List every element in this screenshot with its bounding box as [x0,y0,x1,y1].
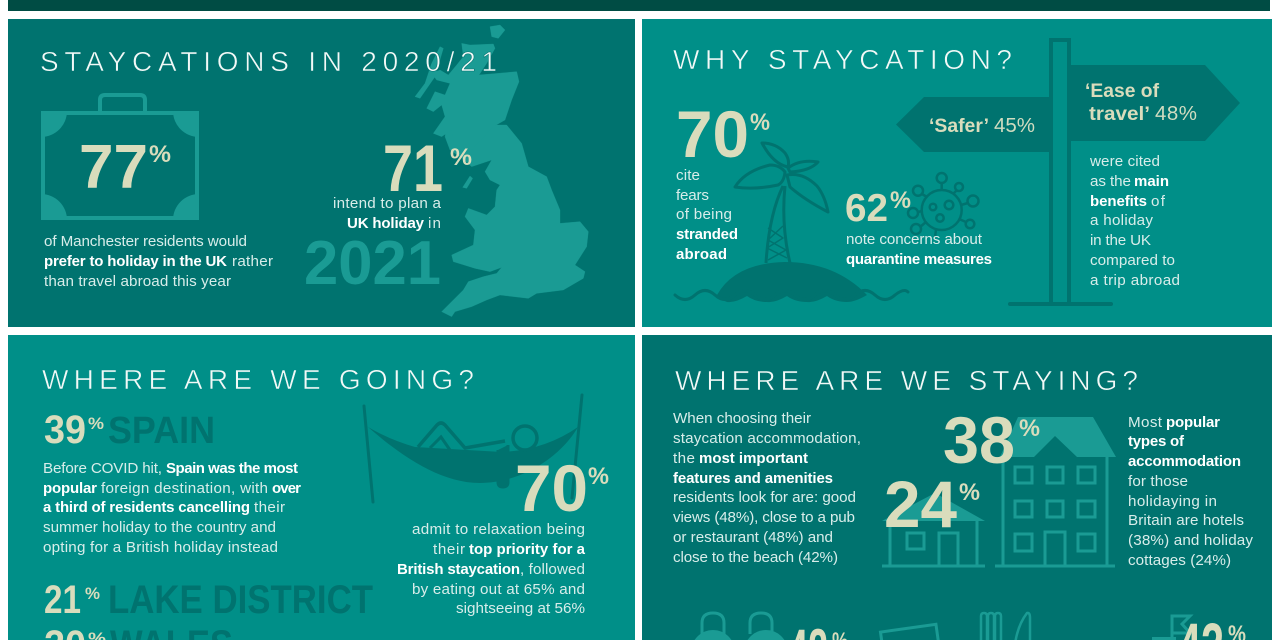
text: Spain paragraph: a third of residents cancelling [43,499,250,516]
icon: hammock [364,395,582,502]
stat: 70% stranded: % [750,109,770,136]
text: fears of being stranded [676,167,738,263]
text: features and amenities: staycation accommodation, [673,430,861,447]
text: popular accommodation: popular [1166,414,1220,431]
stat: 77%: % [149,141,171,168]
text: main benefits: of [1151,193,1166,210]
text: popular accommodation: Britain are hotels [1128,512,1244,529]
text: main benefits: compared to [1090,252,1175,269]
text: Manchester residents [44,233,273,290]
icon: card [880,624,942,640]
text: Spain paragraph: opting for a British holiday instead [43,539,278,556]
text: features and amenities: or restaurant (48%) and [673,529,833,546]
sign label: safer: 45% [994,114,1035,137]
text: Spain paragraph [43,460,301,556]
icon: beach flag [1152,616,1190,640]
icon: binoculars [691,613,788,640]
text: fears of being stranded: fears [676,187,709,204]
text: features and amenities: views (48%), close to a pub [673,509,855,526]
stat: 21% Lake District: 21 [44,578,81,622]
sign label: safer [929,114,1035,137]
panel: why staycation [642,19,1272,327]
text: main benefits [1089,153,1180,289]
stat: 71%: 71 [383,131,443,205]
heading: WHY STAYCATION? [673,44,1012,75]
text: main benefits: main [1134,173,1169,190]
text: Spain paragraph: foreign destination, with [101,480,268,497]
icon: palm tree island [675,143,908,302]
stat: 62%: % [890,187,911,214]
stat: 39% Spain: SPAIN [108,410,215,452]
text: fears of being stranded: cite [676,167,700,184]
text: popular accommodation: cottages (24%) [1128,552,1231,569]
text: intend to plan: intend to plan a [333,195,442,212]
text: main benefits: as the [1090,173,1131,190]
map of the UK [415,25,588,317]
text: relaxation: top priority for a [469,541,586,558]
text: Spain paragraph: popular [43,480,97,497]
stat: 21% Lake District: % [85,584,100,603]
text: Manchester residents: prefer to holiday in the UK [44,253,227,270]
text: Spain paragraph: summer holiday to the country and [43,519,276,536]
stat: 70% relaxation: % [588,463,609,490]
stat: 38%: 38 [943,403,1015,477]
panel: staycations in 2020/21 [8,19,635,327]
text: features and amenities [673,410,861,566]
text: Manchester residents: than travel abroad this year [44,273,231,290]
text: popular accommodation: holidaying in [1128,493,1217,510]
text: main benefits: benefits [1090,193,1147,210]
text: quarantine [846,231,992,268]
text: features and amenities: close to the beach (42%) [673,549,838,566]
top banner strip [8,0,1270,11]
stat: 39% Spain: 39 [44,408,86,452]
sign label: ease of travel: ‘Ease of [1085,81,1160,102]
text: Spain paragraph: their [254,499,285,516]
text: intend to plan: UK holiday [347,215,425,232]
heading: WHERE ARE WE GOING? [42,364,474,395]
stat: 62%: 62 [845,187,888,230]
text: main benefits: a holiday [1090,212,1153,229]
icon: suitcase [41,95,199,220]
text: popular accommodation: accommodation [1128,453,1241,470]
text: relaxation: sightseeing at 56% [456,600,585,617]
text: fears of being stranded: stranded [676,226,738,243]
text: relaxation [397,521,586,617]
text: Spain paragraph: over [272,480,301,497]
text: quarantine: note concerns about [846,231,983,248]
text: popular accommodation [1128,414,1253,569]
text: relaxation: admit to relaxation being [412,521,585,538]
text: Manchester residents: rather [232,253,273,270]
text: fears of being stranded: of being [676,206,732,223]
heading: STAYCATIONS IN 2020/21 [40,46,497,77]
stat: 39% Spain: % [88,414,104,433]
icon: virus [908,173,978,238]
text: relaxation: British staycation [397,561,520,578]
text: features and amenities: features and amenities [673,470,833,487]
heading: WHERE ARE WE STAYING? [675,365,1138,396]
icon: tall hotel [995,417,1116,566]
text: relaxation: by eating out at 65% and [412,581,585,598]
stat: 70% stranded: 70 [676,97,749,171]
text: fears of being stranded: abroad [676,246,727,263]
text: popular accommodation: Most [1128,414,1163,431]
text: Spain paragraph: Spain was the most [166,460,298,477]
icon: fork and knife [981,613,1030,640]
stat: 71%: % [450,144,472,171]
stat: 20% Wales [44,623,233,640]
text: quarantine: quarantine measures [846,251,992,268]
text: intend to plan: in [428,215,441,232]
stat: 24%: % [959,479,980,506]
stat: 24%: 24 [884,467,957,541]
stat: 77%: 77 [79,133,148,202]
text: features and amenities: the [673,450,695,467]
stat: 38%: % [1019,415,1040,442]
sign label: ease of travel [1085,81,1197,125]
text: popular accommodation: (38%) and holiday [1128,532,1253,549]
text: features and amenities: When choosing their [673,410,811,427]
panel: where are we staying [642,335,1272,640]
stat: 62% [845,187,911,230]
text: Manchester residents: of Manchester residents would [44,233,247,250]
year 2021: 2021 [304,229,441,298]
text: main benefits: were cited [1089,153,1160,170]
text: Spain paragraph: Before COVID hit, [43,460,162,477]
text: popular accommodation: types of [1128,433,1185,450]
text: relaxation: , followed [520,561,585,578]
sign label: safer: ‘Safer’ [929,116,989,137]
sign label: ease of travel: travel’ [1089,104,1150,125]
panel: where are we going [8,335,635,640]
text: relaxation: their [433,541,465,558]
text: main benefits: a trip abroad [1090,272,1180,289]
text: main benefits: in the UK [1090,232,1151,249]
icon: small cottage [882,493,985,566]
text: intend to plan [333,195,442,232]
signpost [896,40,1240,306]
text: features and amenities: most important [699,450,808,467]
sign label: ease of travel: 48% [1155,102,1197,125]
stat: 21% Lake District: LAKE DISTRICT [108,578,373,622]
text: popular accommodation: for those [1128,473,1188,490]
stat: 70% relaxation: 70 [515,451,588,525]
stat: 39% Spain [44,408,215,452]
text: features and amenities: residents look for are: good [673,489,856,506]
